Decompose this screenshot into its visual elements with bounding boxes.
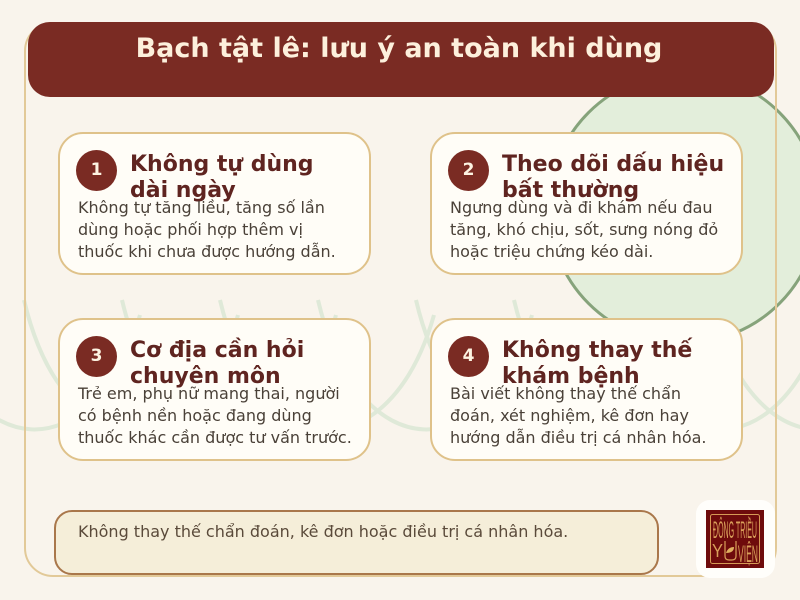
card 4 heading: Không thay thế — [502, 338, 692, 363]
card 2 heading: Theo dõi dấu hiệu — [502, 152, 724, 177]
panel: card 1 — [58, 132, 371, 275]
card 3 heading — [130, 338, 304, 389]
panel: card 2 — [430, 132, 743, 275]
logo badge — [696, 500, 775, 578]
card 2 body: Ngưng dùng và đi khám nếu đau — [450, 198, 713, 217]
card 4 heading: khám bệnh — [502, 364, 640, 389]
card 3 heading: Cơ địa cần hỏi — [130, 338, 304, 363]
card 4 body — [450, 384, 707, 447]
logo mark: Y — [712, 541, 723, 561]
card 3 body: thuốc khác cần được tư vấn trước. — [78, 428, 352, 447]
card 1 body: Không tự tăng liều, tăng số lần — [78, 198, 325, 217]
card 1 heading: dài ngày — [130, 178, 236, 203]
card 3 body — [78, 384, 352, 447]
card 4 body: hướng dẫn điều trị cá nhân hóa. — [450, 428, 707, 447]
number badge 4: 4 — [463, 346, 474, 366]
card 4 body: Bài viết không thay thế chẩn — [450, 384, 681, 403]
card 1 body: thuốc khi chưa được hướng dẫn. — [78, 242, 336, 261]
panel: card 4 — [430, 318, 743, 461]
card 4 body: đoán, xét nghiệm, kê đơn hay — [450, 406, 689, 425]
card 1 heading — [130, 152, 314, 203]
card 2 body: hoặc triệu chứng kéo dài. — [450, 242, 653, 261]
card 3 body: Trẻ em, phụ nữ mang thai, người — [78, 384, 340, 403]
number badge 3 — [76, 336, 117, 377]
card 1 heading: Không tự dùng — [130, 152, 314, 177]
panel: card 3 — [58, 318, 371, 461]
panel: footer note — [54, 510, 659, 575]
card 3 heading: chuyên môn — [130, 364, 281, 389]
card 2 heading: bất thường — [502, 178, 639, 203]
card 1 body: dùng hoặc phối hợp thêm vị — [78, 220, 303, 239]
card 3 body: có bệnh nền hoặc đang dùng — [78, 406, 312, 425]
number badge 1 — [76, 150, 117, 191]
card 2 body — [450, 198, 718, 261]
card 2 body: tăng, khó chịu, sốt, sưng nóng đỏ — [450, 220, 718, 239]
header banner — [28, 22, 774, 97]
number badge 3: 3 — [91, 346, 102, 366]
logo mark — [706, 510, 764, 568]
number badge 2 — [448, 150, 489, 191]
footer text: Không thay thế chẩn đoán, kê đơn hoặc điều trị cá nhân hóa. — [78, 522, 568, 541]
title: Bạch tật lê: lưu ý an toàn khi dùng — [136, 33, 662, 64]
number badge 2: 2 — [463, 160, 474, 180]
number badge 1: 1 — [91, 160, 102, 180]
number badge 4 — [448, 336, 489, 377]
card 2 heading — [502, 152, 724, 203]
card 1 body — [78, 198, 336, 261]
card 4 heading — [502, 338, 692, 389]
